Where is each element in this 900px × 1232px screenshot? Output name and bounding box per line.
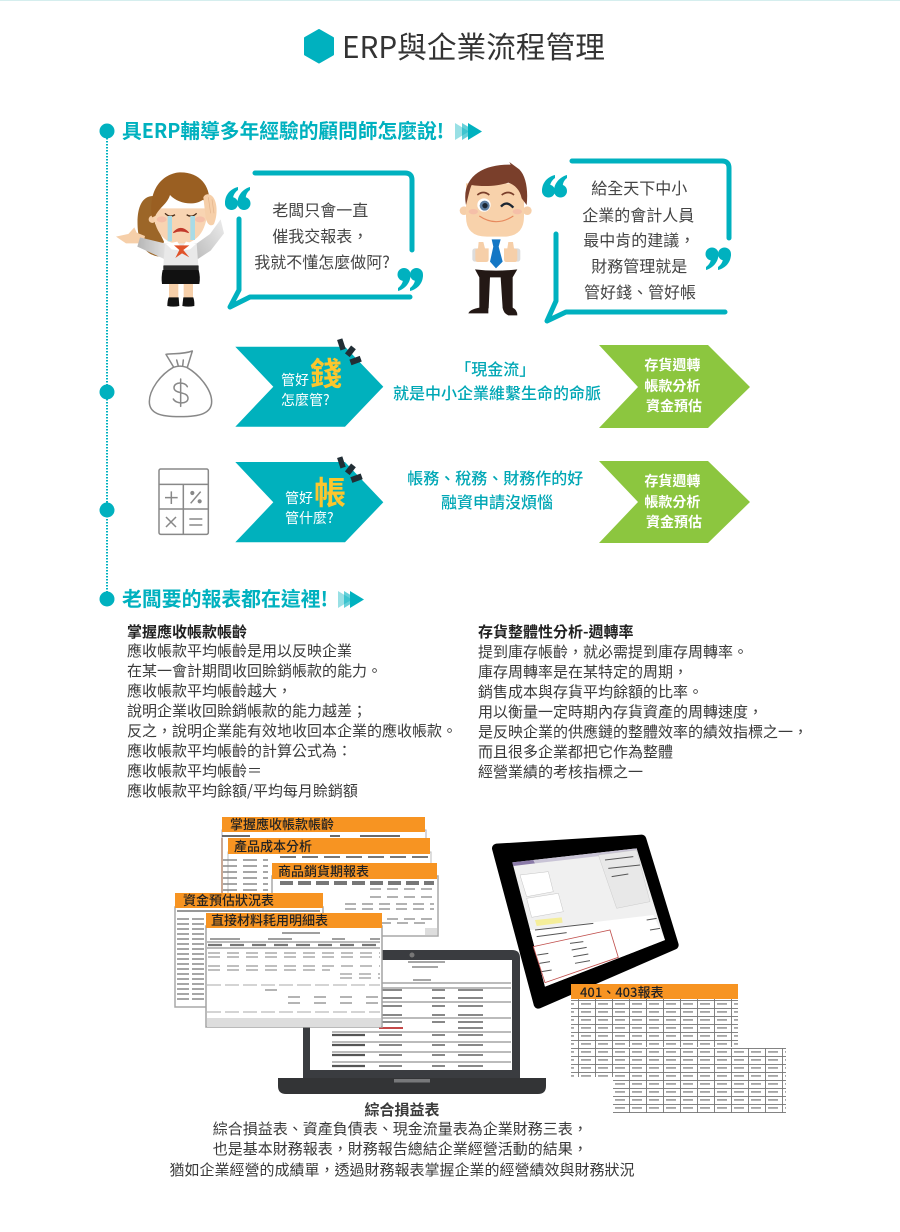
orange header [571, 984, 738, 999]
green chevron text: 資金預估 [646, 512, 702, 532]
chevron text: 管好 [281, 370, 309, 390]
text block: receivable ageing: 應收帳款平均帳齡越大， [127, 680, 292, 701]
emphasis marks [337, 456, 363, 483]
sheet: fund forecast [175, 890, 323, 1007]
title [305, 23, 605, 67]
sheet: receivable ageing: 掌握應收帳款帳齡 [230, 814, 334, 833]
caption: 綜合損益表、資產負債表、現金流量表為企業財務三表， [213, 1118, 588, 1139]
text block: receivable ageing: 說明企業收回賒銷帳款的能力越差； [127, 700, 367, 721]
emphasis marks [337, 338, 362, 365]
text block: inventory turnover: 庫存周轉率是在某特定的周期， [478, 661, 688, 682]
text block: receivable ageing: 掌握應收帳款帳齡 [127, 621, 247, 642]
green chevron text: 存貨週轉 [644, 355, 700, 375]
form table lower [613, 1048, 786, 1113]
row: accounts management: 管什麼? [285, 508, 334, 528]
green chevron text: 存貨週轉 [644, 471, 700, 491]
middle message: 帳務、稅務、財務作的好 [407, 465, 583, 489]
teal chevron [235, 347, 383, 427]
icon: money bag [149, 351, 212, 417]
tablet [497, 839, 674, 1004]
sheet: product cost [222, 836, 431, 902]
green chevron text: 帳款分析 [644, 492, 700, 512]
text block: receivable ageing [127, 621, 460, 801]
middle message: 「現金流」 [455, 356, 535, 380]
icon: hexagon [305, 30, 333, 62]
text block: receivable ageing: 應收帳款平均帳齡＝ [127, 760, 262, 781]
middle message: 就是中小企業維繫生命的命脈 [393, 380, 601, 404]
green chevron text: 帳款分析 [644, 376, 700, 396]
sheet: fund forecast: 資金預估狀況表 [183, 890, 274, 909]
icon: crying woman [116, 172, 224, 307]
401/403 report: 401、403報表 [580, 982, 663, 1001]
bubble text: 老闆只會一直 [272, 197, 368, 221]
text block: inventory turnover: 用以衡量一定時期內存貨資產的周轉速度， [478, 701, 763, 722]
bubble outline [547, 161, 729, 321]
text block: inventory turnover: 經營業績的考核指標之一 [478, 761, 643, 782]
sheet: receivable ageing [222, 814, 426, 895]
row: accounts management: 帳 [314, 468, 346, 514]
caption: 也是基本財務報表，財務報告總結企業經營活動的結果， [213, 1138, 588, 1159]
speech bubble 1 [225, 173, 423, 307]
caption: 猶如企業經營的成績單，透過財務報表掌握企業的經營績效與財務狀況 [169, 1159, 635, 1180]
bubble text: 管好錢、管好帳 [584, 279, 696, 303]
row: money management: 錢 [310, 349, 342, 395]
title text: ERP與企業流程管理 [342, 23, 605, 67]
middle message: 融資申請沒煩惱 [441, 489, 553, 513]
row: money management [149, 338, 750, 428]
report sheets [175, 814, 438, 1027]
green chevron text: 資金預估 [646, 396, 702, 416]
text block: inventory turnover: 存貨整體性分析-週轉率 [478, 621, 634, 642]
icon: opening quote [542, 175, 567, 198]
icon: closing quote [398, 268, 423, 291]
icon: winking man [460, 162, 532, 315]
bubble text: 催我交報表， [272, 223, 368, 247]
form table upper [571, 999, 738, 1047]
text block: inventory turnover: 是反映企業的供應鏈的整體效率的績效指標之一， [478, 721, 808, 742]
top stripe [0, 0, 900, 1]
text block: inventory turnover: 銷售成本與存貨平均餘額的比率。 [478, 681, 703, 702]
caption [169, 1099, 635, 1180]
bubble outline [230, 173, 412, 307]
section heading: reports: 老闆要的報表都在這裡! [122, 583, 328, 612]
text block: receivable ageing: 在某一會計期間收回賒銷帳款的能力。 [127, 660, 382, 681]
sheet: sales report [272, 861, 438, 936]
text block: inventory turnover [478, 621, 811, 782]
text block: receivable ageing: 應收帳款平均餘額/平均每月賒銷額 [127, 780, 358, 801]
form table left [571, 1047, 613, 1077]
bubble text: 財務管理就是 [591, 253, 687, 277]
icon: opening quote [225, 187, 250, 210]
row: money management: 怎麼管? [281, 390, 330, 410]
text block: inventory turnover: 提到庫存帳齡，就必需提到庫存周轉率。 [478, 641, 748, 662]
laptop [278, 950, 546, 1094]
green chevron [599, 345, 750, 428]
bubble text: 我就不懂怎麼做阿? [254, 249, 390, 273]
sheet: sales report: 商品銷貨期報表 [278, 861, 369, 880]
icon: closing quote [706, 248, 731, 270]
sheet: material usage: 直接材料耗用明細表 [211, 910, 328, 929]
green chevron [599, 461, 750, 543]
section heading: consultants: 具ERP輔導多年經驗的顧問師怎麼說! [122, 115, 444, 144]
caption: 綜合損益表 [364, 1099, 440, 1120]
icon: calculator [159, 469, 208, 534]
sheet: product cost: 產品成本分析 [234, 836, 312, 855]
sheet: material usage [206, 910, 382, 1027]
bubble text: 給全天下中小 [591, 175, 687, 199]
text block: receivable ageing: 反之，說明企業能有效地收回本企業的應收帳款。 [127, 720, 457, 741]
text block: inventory turnover: 而且很多企業都把它作為整體 [478, 741, 673, 762]
chevron text: 管好 [285, 488, 313, 508]
teal chevron [235, 462, 383, 542]
text block: receivable ageing: 應收帳款平均帳齡是用以反映企業 [127, 640, 352, 661]
bubble text: 最中肯的建議， [583, 227, 695, 251]
401/403 report [571, 982, 786, 1113]
timeline dotted line [100, 138, 114, 592]
row: accounts management [159, 456, 750, 543]
text block: receivable ageing: 應收帳款平均帳齡的計算公式為： [127, 740, 352, 761]
speech bubble 2 [542, 161, 731, 321]
bubble text: 企業的會計人員 [582, 202, 694, 226]
